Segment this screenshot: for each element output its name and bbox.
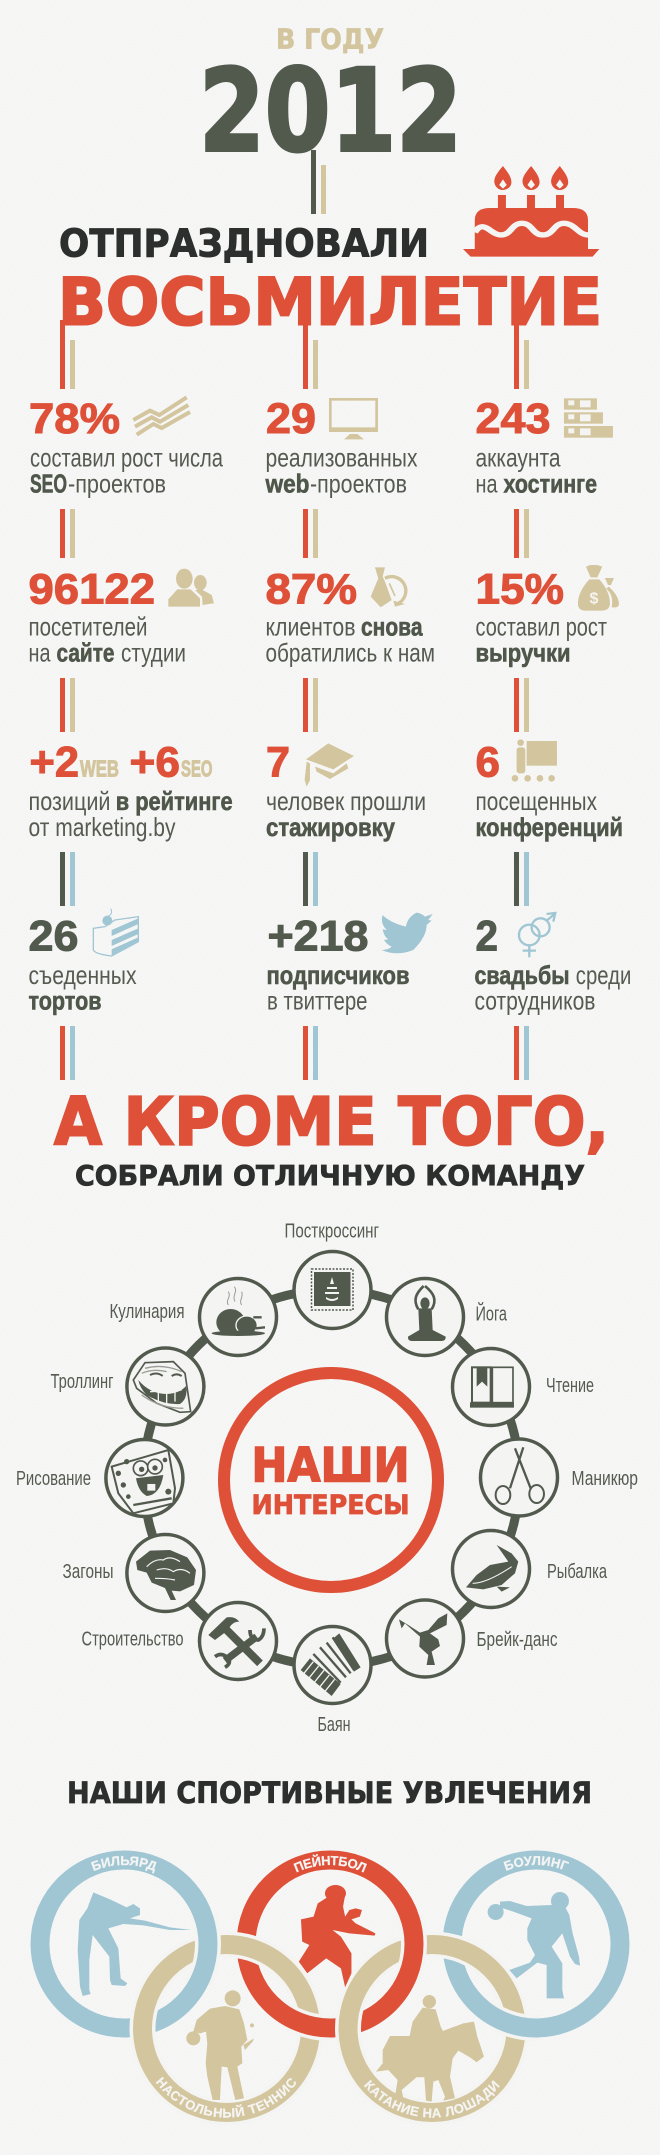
icon: money bags: [578, 565, 619, 611]
stat: 96122 visitors: на: [28, 638, 51, 668]
interest: cooking: [110, 1278, 276, 1356]
heading: наши спортивные увлечения: НАШИ СПОРТИВНЫЕ УВЛЕЧЕНИЯ: [67, 1776, 592, 1810]
silhouette: tennis player: [186, 1990, 254, 2100]
icon: server: [564, 398, 613, 438]
stat: 243 hosting: аккаунта: [476, 442, 561, 472]
stat: 6 conferences: посещенных: [476, 786, 597, 816]
stat: 26 cakes: съеденных: [28, 960, 136, 990]
stat: 29 web: реализованных: [266, 442, 418, 472]
stat: 15% revenue: [476, 565, 619, 668]
interest: postcrossing: Посткроссинг: [284, 1220, 379, 1242]
connectors: row 3 to row 4: [60, 852, 529, 906]
interest: overthinking (brain): [62, 1534, 204, 1612]
ring overlap: billiards over tennis: [192, 1915, 221, 1985]
stat: rating positions: от marketing.by: [28, 812, 176, 842]
icon: gender symbols: [519, 913, 555, 957]
icon: money bags: $: [590, 590, 599, 607]
interest: manicure: Маникюр: [572, 1468, 638, 1490]
panel: sports rings: [40, 1860, 620, 2112]
interest: trolling: Троллинг: [50, 1371, 114, 1393]
stat: 2 weddings: 2: [476, 912, 498, 960]
stat: +218 followers: подписчиков: [266, 960, 410, 990]
interest: bayan: [294, 1626, 371, 1736]
stat: 2 weddings: сотрудников: [474, 986, 596, 1016]
icon: tie and clock: [371, 567, 406, 607]
heading: собрали отличную команду: СОБРАЛИ ОТЛИЧНУЮ КОМАНДУ: [75, 1160, 585, 1192]
icon: cake slice: [93, 909, 138, 956]
stat: 96122 visitors: студии: [121, 638, 186, 668]
stat: 96122 visitors: [28, 566, 214, 668]
interest: breakdance: [386, 1600, 558, 1677]
label: horse riding: КАТАНИЕ НА ЛОШАДИ: [364, 2080, 500, 2118]
interest: cooking: Кулинария: [110, 1301, 184, 1323]
stat: 243 hosting: [476, 395, 613, 498]
label: table tennis: НАСТОЛЬНЫЙ ТЕННИС: [156, 2076, 296, 2118]
interest: yoga: [386, 1278, 508, 1356]
stat: 2 weddings: среди: [576, 960, 631, 990]
stat: 7 interns: [266, 738, 426, 842]
icon: twitter bird: [382, 913, 433, 953]
heading: наши: НАШИ: [252, 1438, 410, 1494]
interest: reading: [452, 1348, 594, 1426]
ring: bowling: [452, 1860, 620, 2028]
stat: 87% returning clients: 87%: [266, 566, 357, 614]
ring overlap: bowling over riding: [490, 2002, 540, 2040]
stat: 15% revenue: составил рост: [476, 612, 607, 642]
heading: 2012: 2012: [199, 44, 462, 178]
stat: rating positions: SEO: [181, 756, 212, 782]
stat: 87% returning clients: [266, 566, 435, 668]
interest: postcrossing: [284, 1220, 379, 1328]
stat: 6 conferences: конференций: [476, 812, 623, 842]
stat: 243 hosting: на: [476, 468, 498, 498]
stat: 87% returning clients: обратились к нам: [266, 638, 435, 668]
stat: 15% revenue: выручки: [476, 638, 570, 668]
stat: 29 web: web: [265, 468, 310, 498]
stat: rating positions: в рейтинге: [116, 786, 233, 816]
silhouette: paintball player: [299, 1885, 375, 1987]
interest: fishing: [452, 1530, 608, 1608]
stat: rating positions: [28, 738, 233, 842]
connectors: row 4 to heading: [60, 1026, 529, 1080]
silhouette: bowler: [488, 1892, 580, 1998]
stat: 26 cakes: [28, 909, 138, 1016]
stat: 2 weddings: [474, 912, 631, 1016]
stat: 78% SEO: [29, 395, 223, 498]
label: paintball: ПЕЙНТБОЛ: [293, 1854, 367, 1872]
interest: fishing: Рыбалка: [547, 1561, 608, 1583]
icon: growth chart: [133, 397, 190, 435]
stat: 15% revenue: 15%: [476, 566, 564, 614]
silhouette: billiards player: [78, 1892, 192, 1996]
stat: 78% SEO: 78%: [29, 395, 120, 443]
panel: interests wheel: [16, 1220, 638, 1736]
connectors: title to first row: [60, 320, 529, 389]
stat: 26 cakes: тортов: [28, 986, 102, 1016]
ring overlap: paintball over riding: [392, 1915, 427, 1985]
stat: rating positions: +6: [130, 738, 180, 786]
stat: 2 weddings: свадьбы: [474, 960, 570, 990]
interest: construction: Строительство: [82, 1629, 184, 1651]
stat: +218 followers: в твиттере: [267, 986, 368, 1016]
connector under 2012: [311, 150, 326, 214]
label: billiards: БИЛЬЯРД: [91, 1856, 156, 1874]
heading: восьмилетие: ВОСЬМИЛЕТИЕ: [58, 266, 602, 340]
stat: 96122 visitors: посетителей: [28, 612, 148, 642]
icon: birthday cake: [463, 166, 599, 257]
ring overlap: paintball over tennis: [285, 2003, 335, 2040]
stat: 29 web: [265, 395, 418, 498]
stat: 78% SEO: -проектов: [68, 468, 166, 498]
stat: 7 interns: 7: [266, 738, 290, 786]
interest: yoga: Йога: [476, 1302, 508, 1326]
label: bowling: БОУЛИНГ: [504, 1856, 570, 1871]
stat: 6 conferences: 6: [476, 738, 500, 786]
icon: people: [168, 569, 214, 607]
interest: trolling: [50, 1348, 204, 1425]
stat: 78% SEO: SEO: [30, 468, 67, 498]
ring: table tennis: [142, 1944, 310, 2112]
heading: а кроме того: А КРОМЕ ТОГО,: [54, 1084, 609, 1160]
connectors: row 1 to row 2: [60, 509, 529, 558]
stat: +218 followers: [266, 912, 433, 1016]
silhouette: horse rider: [376, 1995, 484, 2102]
stat: rating positions: WEB: [80, 756, 119, 782]
stat: 29 web: -проектов: [310, 468, 407, 498]
interest: bayan: Баян: [318, 1714, 350, 1736]
interest: drawing (sponge): Рисование: [16, 1468, 91, 1490]
stat: 87% returning clients: снова: [361, 612, 423, 642]
stat: 87% returning clients: клиентов: [266, 612, 356, 642]
stat: 26 cakes: 26: [28, 912, 78, 960]
stat: rating positions: +2: [30, 738, 79, 786]
stat: 7 interns: человек прошли: [266, 786, 426, 816]
stat: 78% SEO: составил рост числа: [30, 442, 223, 472]
interest: drawing (sponge): [16, 1440, 183, 1516]
stat: 6 conferences: [476, 738, 623, 842]
interest: breakdance: Брейк-данс: [476, 1629, 558, 1651]
heading: интересы: ИНТЕРЕСЫ: [252, 1490, 410, 1521]
stat: 29 web: 29: [266, 395, 316, 443]
heading: в году: В ГОДУ: [276, 22, 384, 56]
ring: billiards: [40, 1860, 208, 2028]
stat: 96122 visitors: 96122: [28, 566, 155, 614]
icon: graduation cap: [305, 743, 354, 787]
stat: 243 hosting: хостинге: [504, 468, 597, 498]
ring: paintball: [246, 1860, 414, 2028]
icon: conference speaker: [512, 739, 557, 782]
interest: overthinking (brain): Загоны: [62, 1561, 114, 1583]
stat: 96122 visitors: сайте: [56, 638, 114, 668]
stat: 243 hosting: 243: [476, 395, 550, 443]
interest: construction: [82, 1602, 276, 1680]
interest: reading: Чтение: [546, 1375, 594, 1397]
heading: отпраздновали: ОТПРАЗДНОВАЛИ: [59, 222, 429, 266]
center ring: [224, 1373, 438, 1587]
stat: +218 followers: +218: [268, 912, 368, 960]
stat: rating positions: позиций: [28, 786, 110, 816]
connectors: row 2 to row 3: [60, 678, 529, 732]
icon: monitor: [329, 398, 378, 439]
stat: 7 interns: стажировку: [266, 812, 395, 842]
interest: manicure: [480, 1439, 638, 1516]
ring: horse riding: [348, 1944, 516, 2112]
